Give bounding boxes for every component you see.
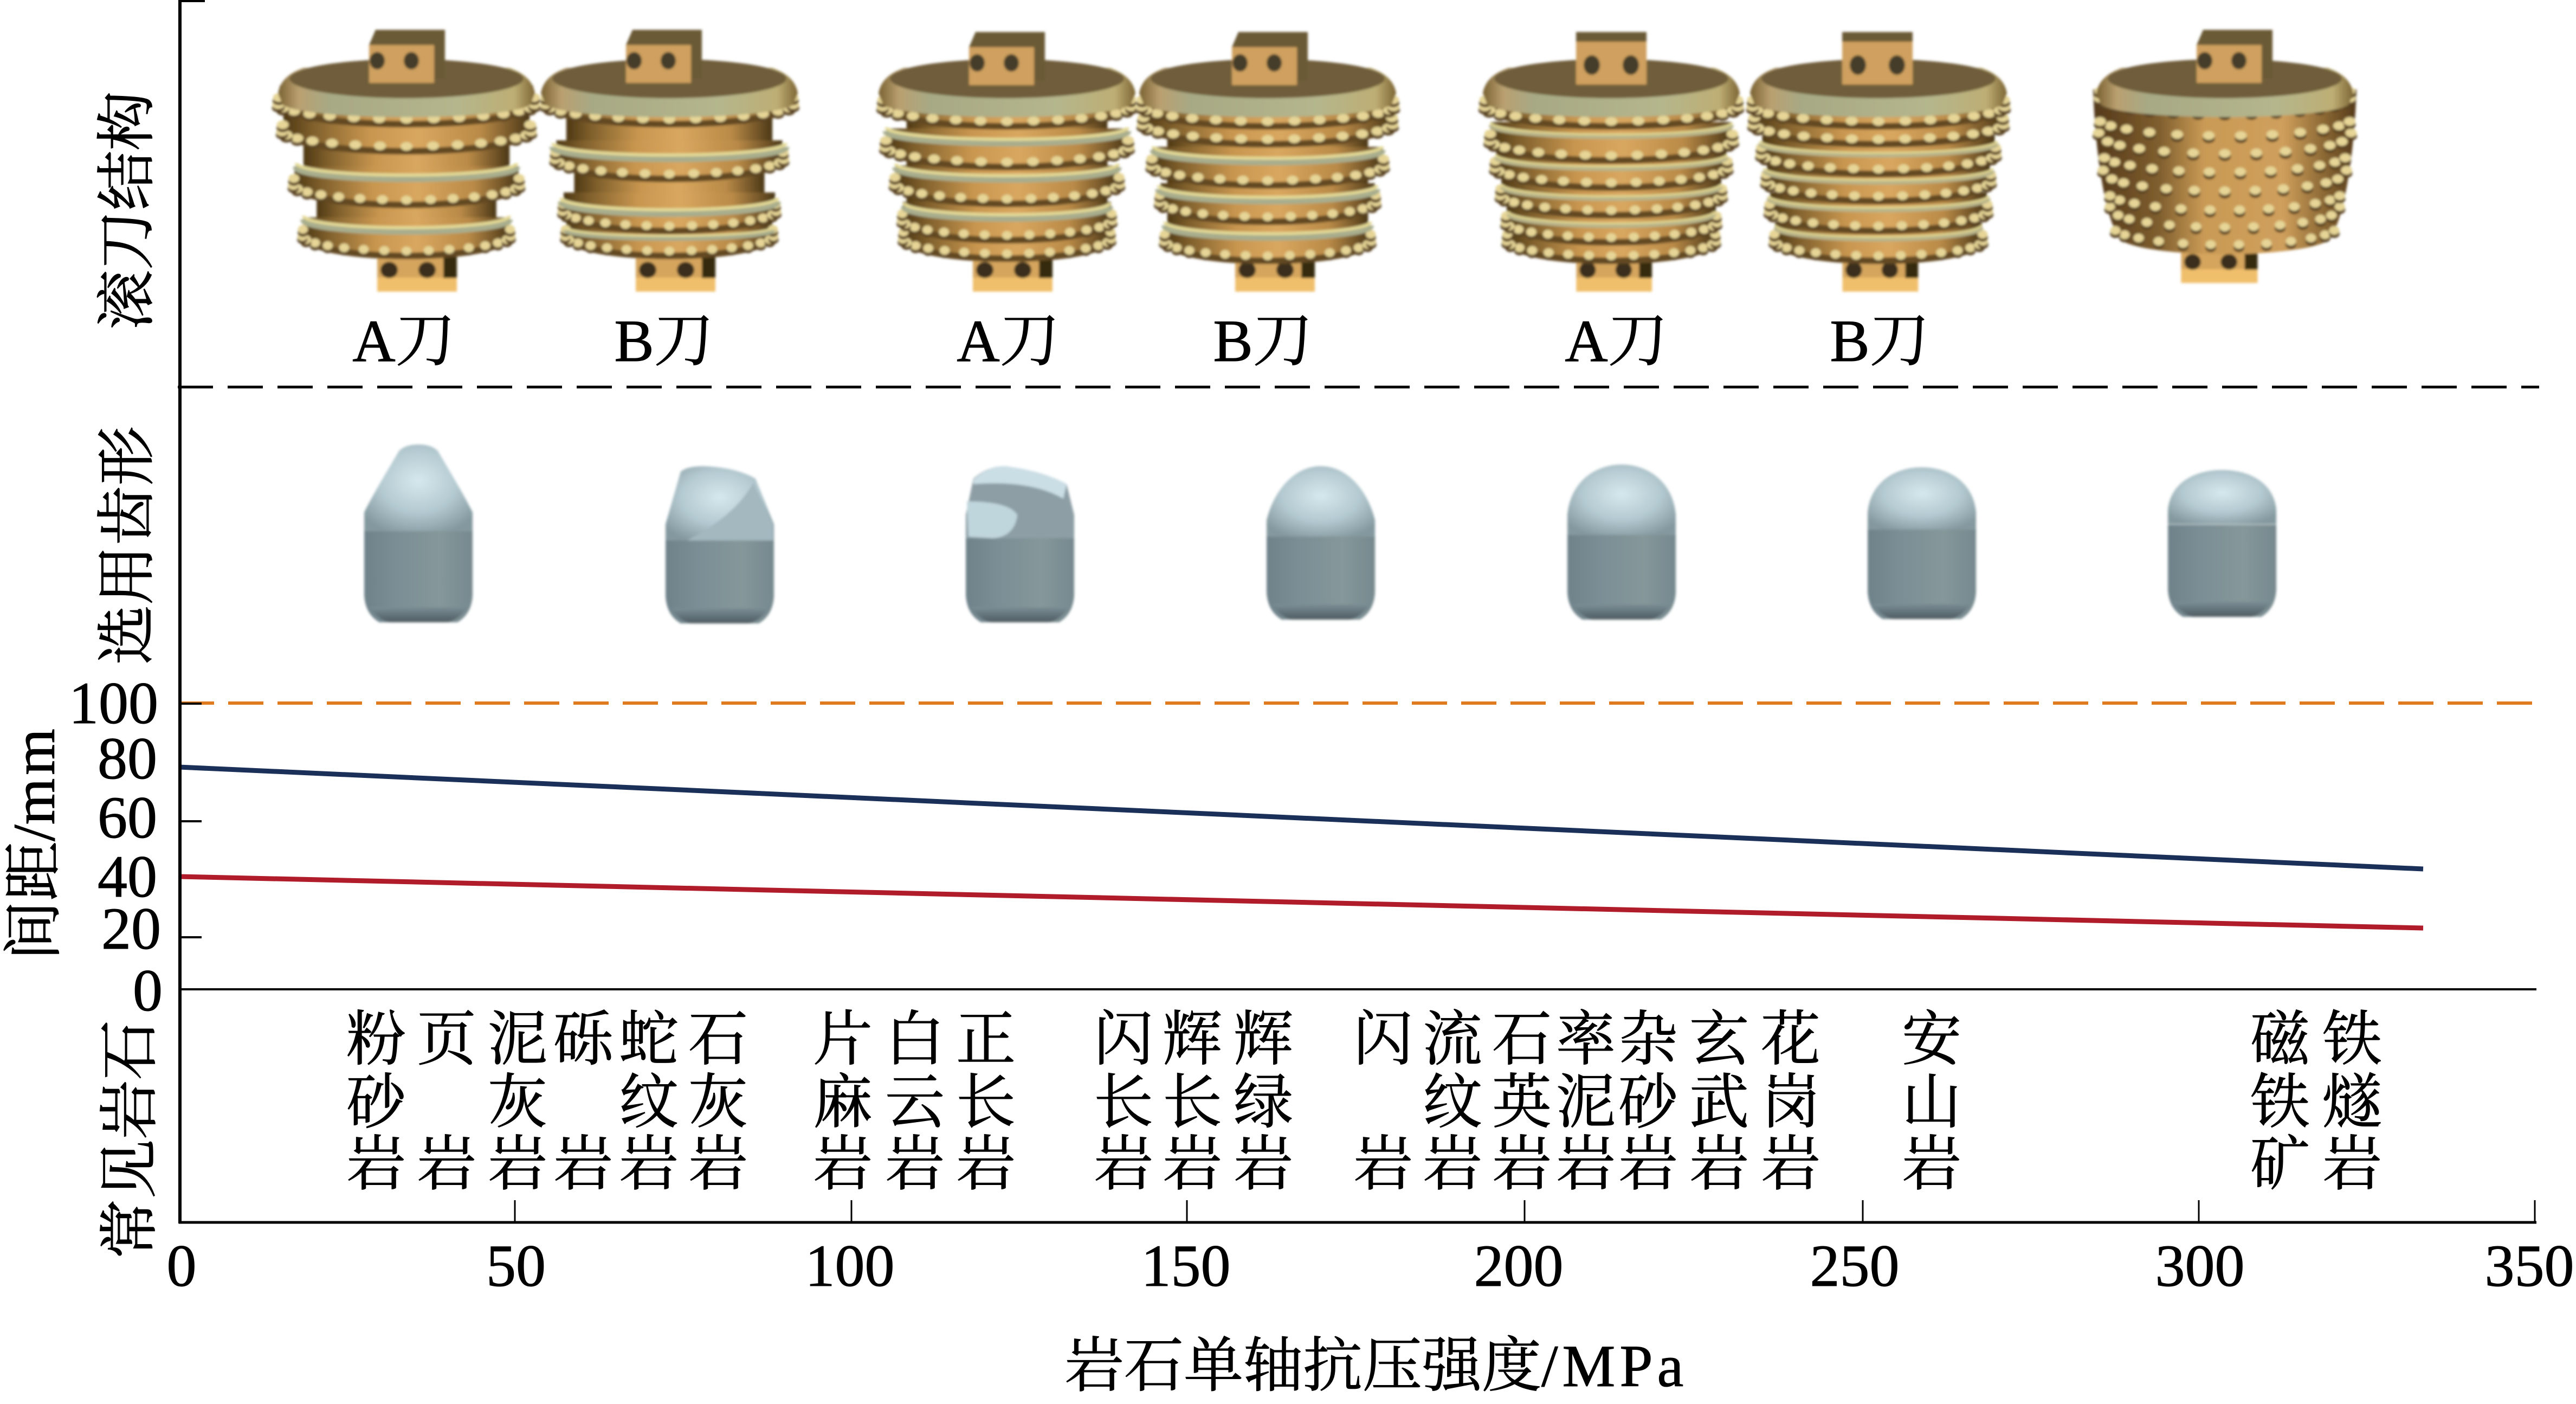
rock: rhyolite: 流 — [1423, 1007, 1482, 1073]
x axis tick labels: 150 — [1141, 1233, 1230, 1299]
y axis tick labels: 0 — [133, 957, 163, 1023]
rock: basalt: 岩 — [1689, 1131, 1749, 1197]
rock: diorite: 闪 — [1094, 1007, 1153, 1073]
rock: chert: 泥 — [1556, 1070, 1616, 1136]
rock: serpentinite: 岩 — [619, 1131, 679, 1197]
rock: limestone: 灰 — [688, 1070, 748, 1136]
icon: tooth 4, parabolic — [1267, 466, 1375, 620]
rock: syenite: 岩 — [956, 1131, 1016, 1197]
rock: marl — [488, 1007, 547, 1197]
rock: magnetite ore — [2250, 1007, 2311, 1197]
line: lower spacing limit — [179, 877, 2423, 928]
rock: marl: 岩 — [488, 1131, 547, 1197]
x axis tick labels: 300 — [2155, 1233, 2245, 1299]
rock: marl: 灰 — [488, 1070, 547, 1136]
rock: rhyolite: 岩 — [1423, 1131, 1482, 1197]
rock: gabbro — [1163, 1007, 1222, 1197]
rock: diorite: 岩 — [1094, 1131, 1153, 1197]
rock: basalt: 玄 — [1689, 1007, 1749, 1073]
icon: B cutter, small spacing — [1746, 32, 2011, 292]
y axis tick labels: 40 — [98, 843, 157, 910]
axis frame and ticks — [179, 0, 2536, 1223]
label: A cutter 1: A刀 — [352, 308, 455, 374]
x axis tick labels — [167, 1233, 2574, 1299]
rock: quartzite: 石 — [1492, 1007, 1552, 1073]
rock: granite — [1761, 1007, 1820, 1197]
label: common rocks: 常见岩石 — [97, 1020, 163, 1259]
rock: gneiss: 岩 — [813, 1131, 873, 1197]
rock: diabase: 辉 — [1234, 1007, 1293, 1073]
rock: syenite — [956, 1007, 1016, 1197]
rock: andesite: 山 — [1902, 1070, 1961, 1136]
y axis tick labels: 100 — [69, 670, 158, 736]
rock: granite: 岗 — [1761, 1070, 1820, 1136]
label: spacing in mm: 间距/mm — [1, 725, 67, 961]
rock: conglomerate: 岩 — [553, 1131, 613, 1197]
x axis tick labels: 250 — [1810, 1233, 1899, 1299]
rock: magnetite ore: 铁 — [2250, 1070, 2310, 1136]
rock: granite: 花 — [1761, 1007, 1820, 1073]
rock: andesite: 岩 — [1902, 1131, 1961, 1197]
rock: gabbro: 辉 — [1163, 1007, 1222, 1073]
rock: quartzite: 岩 — [1492, 1131, 1552, 1197]
panel: common rock names — [346, 1007, 2383, 1197]
icon: tooth 2, wedge chisel — [666, 466, 774, 623]
rock: diabase: 岩 — [1234, 1131, 1293, 1197]
line: upper spacing limit — [179, 767, 2423, 869]
rock: andesite — [1902, 1007, 1961, 1197]
rock: diorite — [1094, 1007, 1153, 1197]
rock: shale: 页 — [417, 1007, 476, 1073]
rock: dolomite: 岩 — [885, 1131, 945, 1197]
rock: magnetite ore: 矿 — [2250, 1131, 2310, 1197]
rock: siltstone: 岩 — [346, 1131, 406, 1197]
rock: conglomerate — [553, 1007, 615, 1197]
rock: serpentinite — [619, 1007, 679, 1197]
rock: amphibolite — [1353, 1007, 1413, 1197]
icon: tooth 5, dome with shoulder — [1567, 465, 1676, 620]
y axis tick labels: 20 — [101, 896, 161, 962]
rock: dolomite: 云 — [885, 1070, 945, 1136]
y axis row labels — [1, 91, 163, 1259]
rock: dolomite — [885, 1007, 945, 1197]
icon: B cutter, three-ring large spacing — [539, 30, 799, 292]
rock: rhyolite — [1423, 1007, 1482, 1197]
label: tooth shapes: 选用齿形 — [94, 426, 160, 665]
rock: chert: 率 — [1556, 1007, 1616, 1073]
icon: tooth 1, sharp cone — [364, 445, 473, 622]
rock: greywacke: 砂 — [1618, 1070, 1680, 1136]
rock: siltstone — [346, 1007, 408, 1197]
rock: magnetite ore: 磁 — [2250, 1007, 2311, 1073]
rock: taconite — [2322, 1007, 2383, 1197]
rock: limestone: 岩 — [688, 1131, 748, 1197]
icon: B cutter, medium spacing — [1135, 32, 1400, 292]
rock: diabase — [1234, 1007, 1293, 1197]
label: B cutter 2: B刀 — [1213, 308, 1313, 374]
rock: diorite: 长 — [1094, 1070, 1153, 1136]
icon: A cutter, three-ring large spacing — [272, 30, 541, 292]
label: A cutter 3: A刀 — [1565, 308, 1668, 374]
x axis tick labels: 350 — [2484, 1233, 2574, 1299]
x axis tick labels: 0 — [167, 1233, 196, 1299]
label: cutter structure: 滚刀结构 — [94, 91, 160, 330]
label: A cutter 2: A刀 — [957, 308, 1060, 374]
icon: tooth 3, scoop chisel — [966, 466, 1074, 622]
x axis tick labels: 100 — [805, 1233, 894, 1299]
rock: conglomerate: 砾 — [553, 1007, 615, 1073]
rock: gneiss — [813, 1007, 873, 1197]
x axis title: 岩石单轴抗压强度/MPa — [1064, 1333, 1688, 1399]
threshold line at 100 mm — [179, 701, 2539, 705]
rock: gneiss: 麻 — [813, 1070, 873, 1136]
icon: A cutter, small spacing — [1479, 32, 1744, 292]
rock: taconite: 燧 — [2322, 1070, 2383, 1136]
rock: greywacke: 岩 — [1618, 1131, 1678, 1197]
rock: marl: 泥 — [488, 1007, 547, 1073]
rock: rhyolite: 纹 — [1423, 1070, 1482, 1136]
rock: amphibolite: 闪 — [1353, 1007, 1413, 1073]
rock: greywacke: 杂 — [1618, 1007, 1678, 1073]
panel: row divider dashed line — [178, 386, 2539, 388]
rock: siltstone: 砂 — [346, 1070, 408, 1136]
rock: gneiss: 片 — [813, 1007, 873, 1073]
rock: diabase: 绿 — [1234, 1070, 1293, 1136]
rock: serpentinite: 纹 — [619, 1070, 679, 1136]
rock: basalt — [1689, 1007, 1749, 1197]
rock: amphibolite: 岩 — [1353, 1131, 1413, 1197]
x axis tick labels: 50 — [486, 1233, 546, 1299]
icon: full-face dense cutter — [2093, 30, 2357, 283]
rock: chert — [1556, 1007, 1616, 1197]
label: B cutter 1: B刀 — [614, 308, 714, 374]
rock: basalt: 武 — [1689, 1070, 1749, 1136]
rock: quartzite — [1492, 1007, 1552, 1197]
label: B cutter 3: B刀 — [1830, 308, 1929, 374]
rock: taconite: 铁 — [2322, 1007, 2382, 1073]
rock: greywacke — [1618, 1007, 1680, 1197]
icon: A cutter, medium spacing — [876, 32, 1138, 292]
rock: limestone: 石 — [688, 1007, 748, 1073]
rock: gabbro: 长 — [1163, 1070, 1222, 1136]
rock: shale — [417, 1007, 476, 1197]
x axis tick labels: 200 — [1474, 1233, 1563, 1299]
y axis tick labels: 60 — [98, 784, 157, 851]
y axis tick labels — [69, 670, 163, 1023]
rock: serpentinite: 蛇 — [619, 1007, 679, 1073]
rock: quartzite: 英 — [1492, 1070, 1552, 1136]
icon: tooth 6, hemispherical — [1868, 467, 1976, 619]
panel: cutter structure row — [272, 30, 2357, 374]
icon: tooth 7, short hemispherical — [2168, 470, 2276, 617]
rock: dolomite: 白 — [885, 1007, 945, 1073]
rock: siltstone: 粉 — [346, 1007, 406, 1073]
y axis tick labels: 80 — [98, 725, 157, 791]
rock: shale: 岩 — [417, 1131, 476, 1197]
rock: chert: 岩 — [1556, 1131, 1616, 1197]
rock: limestone — [688, 1007, 748, 1197]
rock: andesite: 安 — [1902, 1007, 1961, 1073]
rock: granite: 岩 — [1761, 1131, 1820, 1197]
rock: gabbro: 岩 — [1163, 1131, 1222, 1197]
rock: syenite: 正 — [956, 1007, 1016, 1073]
rock: taconite: 岩 — [2322, 1131, 2382, 1197]
rock: syenite: 长 — [956, 1070, 1016, 1136]
panel: selected tooth shapes row — [364, 445, 2276, 623]
